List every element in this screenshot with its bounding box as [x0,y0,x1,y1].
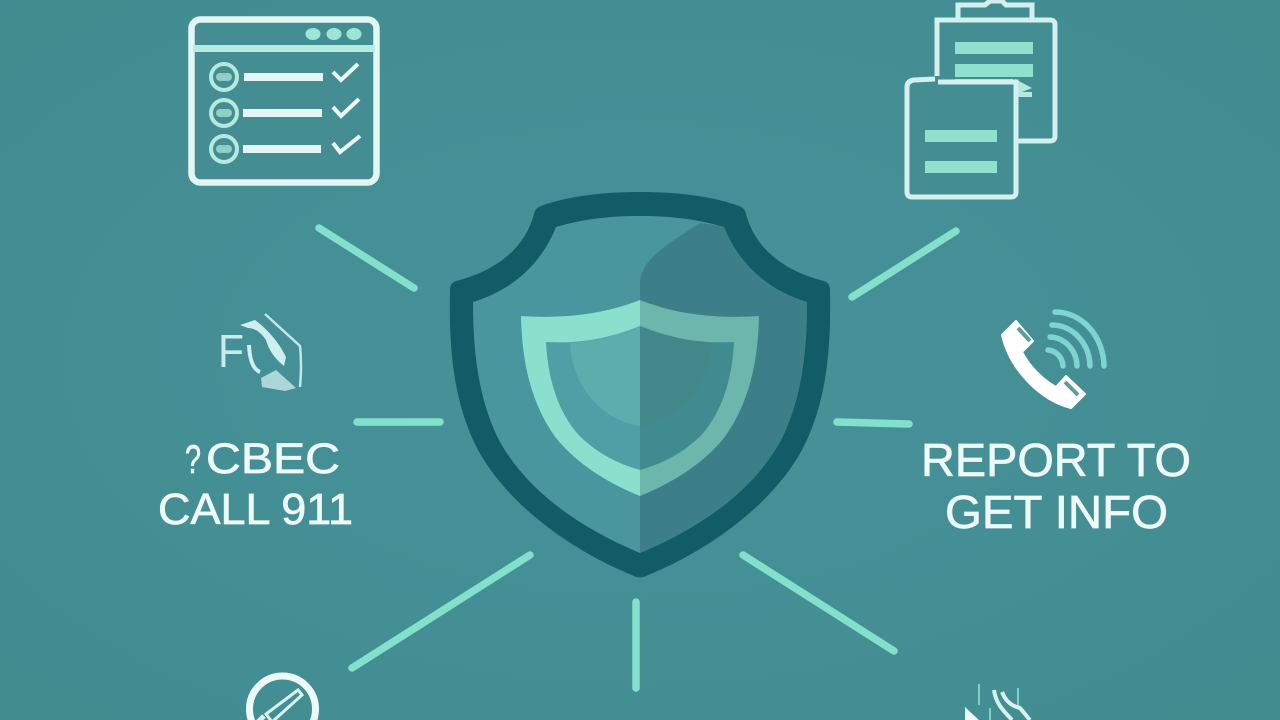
text: left label: ? [185,438,201,482]
icon: clipboard documents [907,1,1055,197]
text: right label: GET INFO [945,486,1168,538]
rays around the shield [319,228,956,688]
icon: prohibited sign, bottom left [250,676,316,720]
text: left label: CALL 911 [158,485,353,534]
text: right label [921,434,1191,538]
text: left label [158,435,353,534]
central shield [450,192,830,578]
icon: checklist window [192,20,376,182]
icon: garbled hand emblem, left: F [218,325,244,377]
icon: garbled hand emblem, left [218,314,301,391]
text: right label: REPORT TO [921,434,1191,486]
icon: partial hand, bottom right [965,684,1030,720]
inner emblem ring [521,300,759,496]
text: left label: CBEC [206,435,340,483]
icon: phone with signal waves [1002,312,1104,408]
